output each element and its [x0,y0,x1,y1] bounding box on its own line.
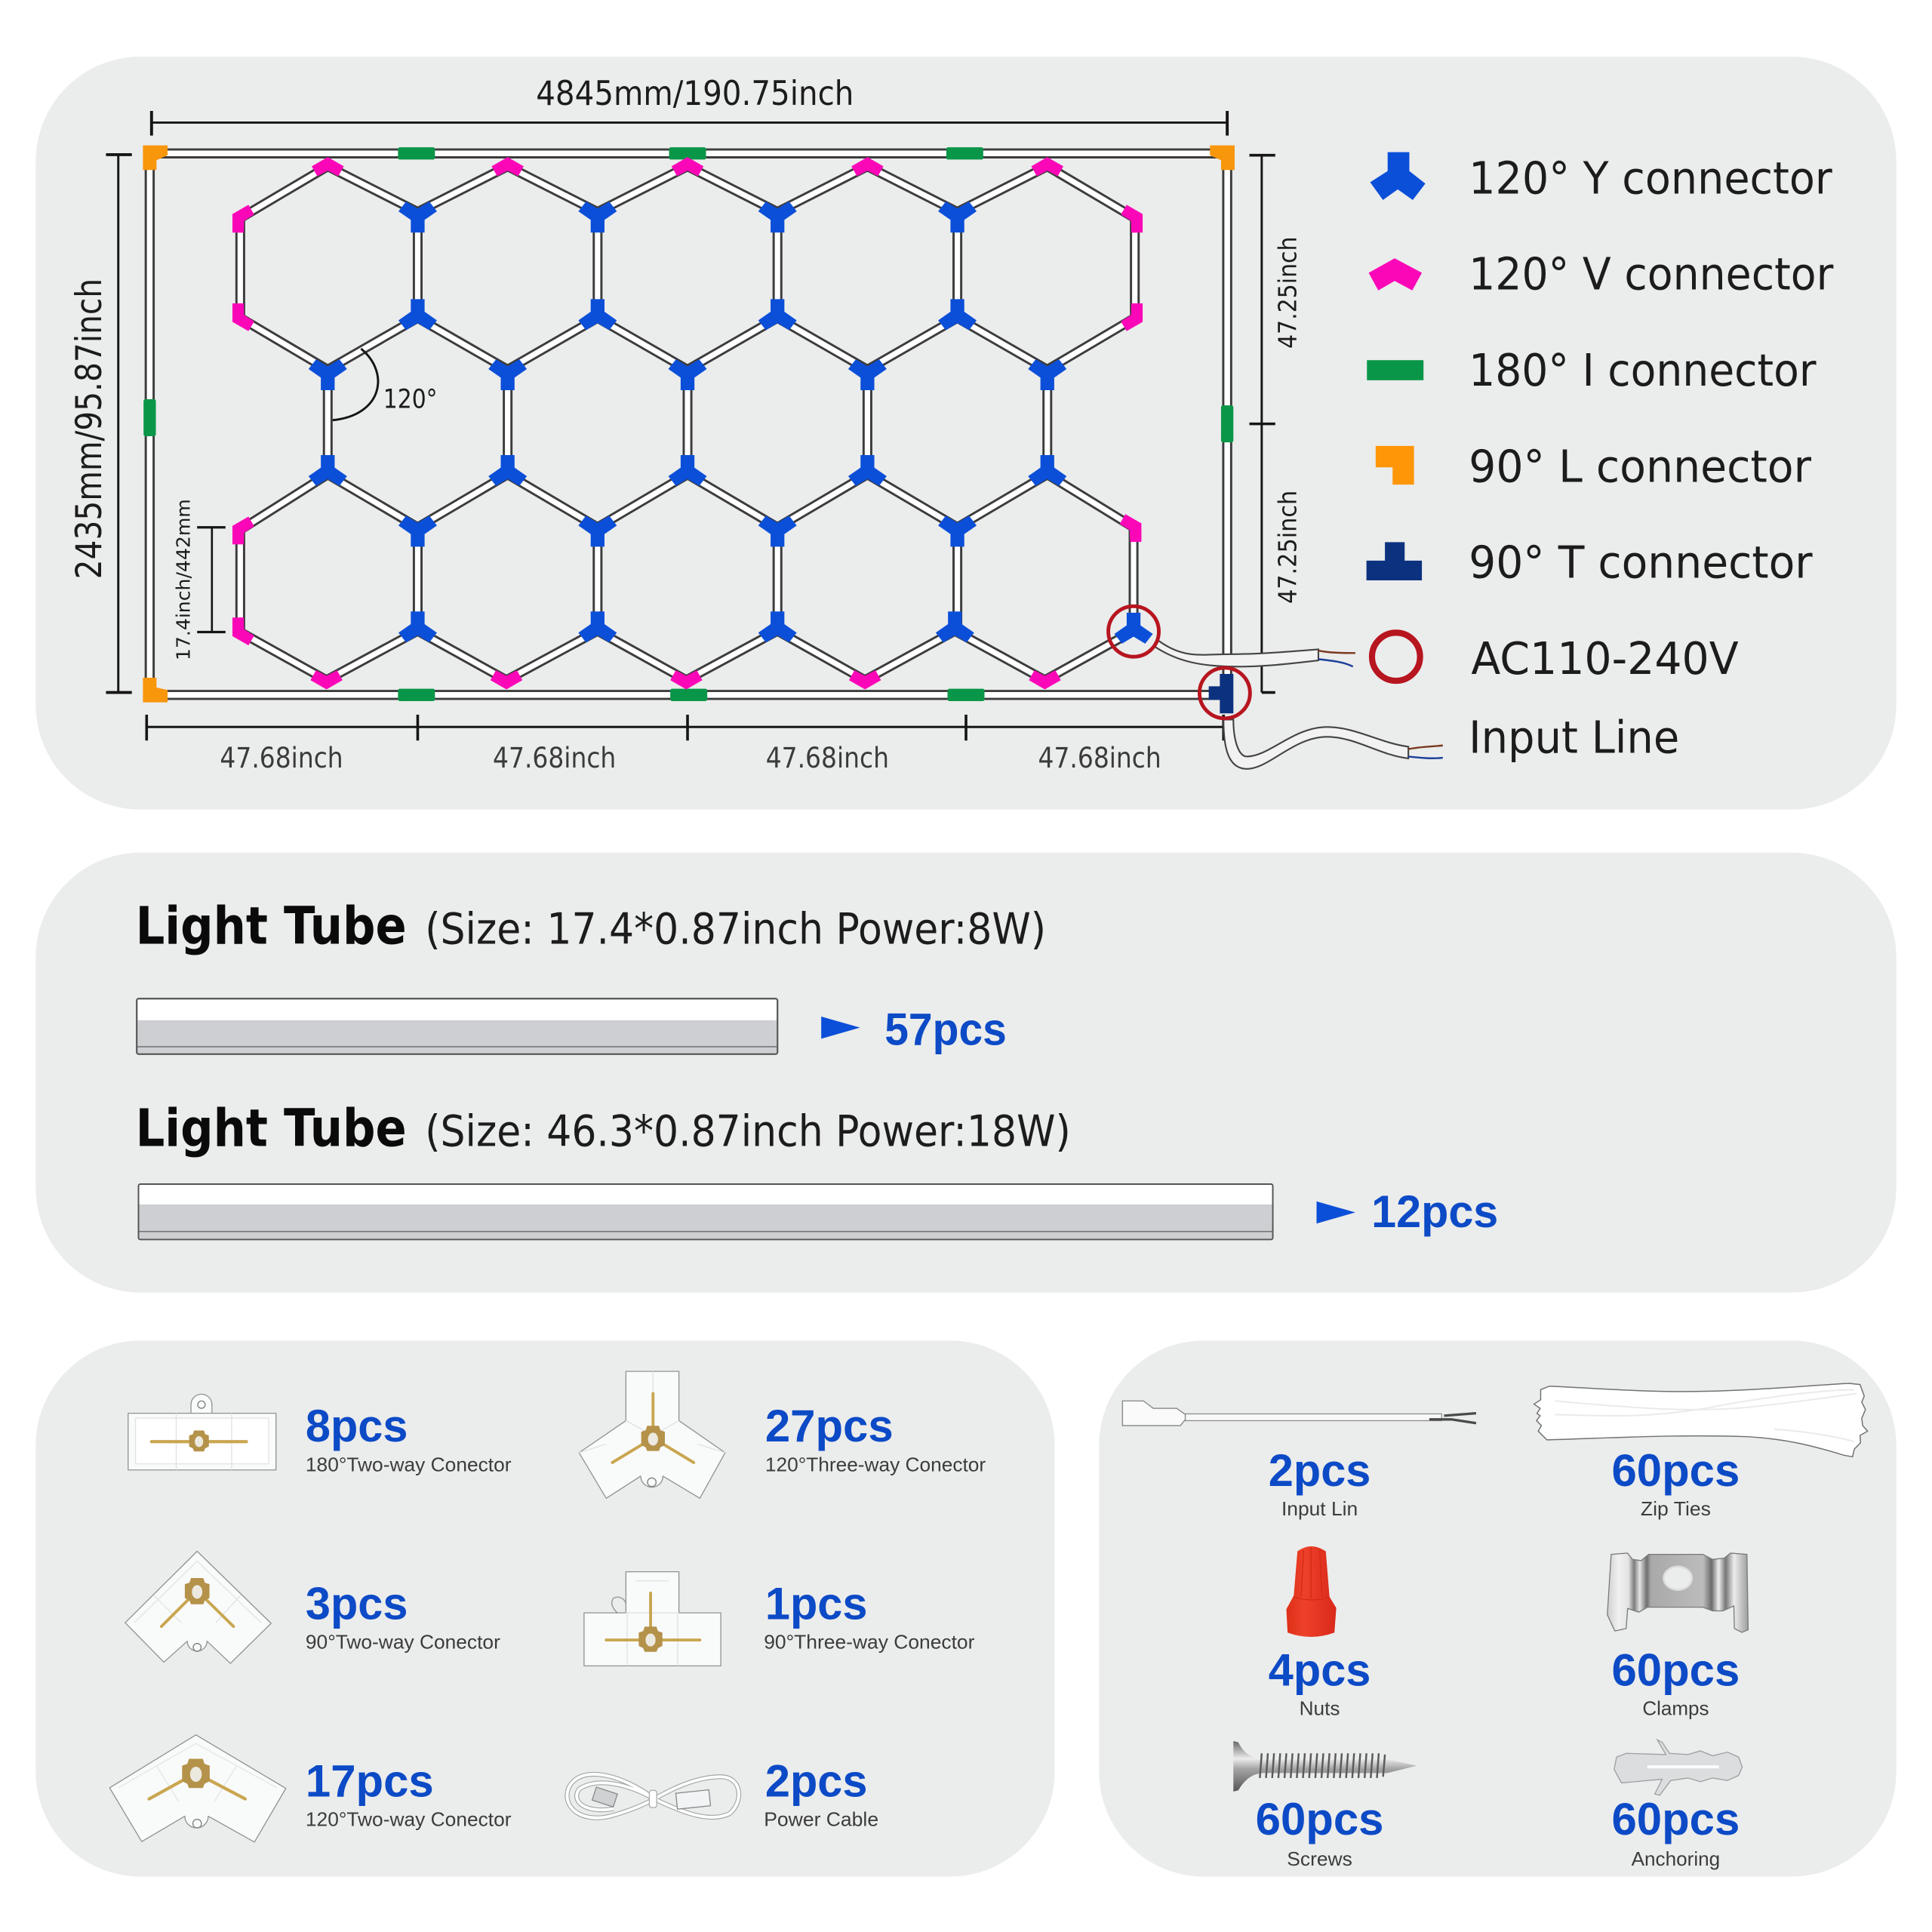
power cable label [764,1755,878,1831]
panel: layout diagram [35,57,1897,810]
icon: 120 degree three-way connector [579,1371,725,1498]
120 degree two-way connector label: 17pcs [306,1755,434,1806]
short tube quantity: 57pcs [884,1003,1007,1054]
120 degree three-way connector label: 27pcs [765,1400,894,1451]
icon: input line [1122,1401,1476,1426]
zip ties label: Zip Ties [1641,1497,1711,1520]
short tube heading: (Size: 17.4*0.87inch Power:8W) [425,905,1046,955]
short tube quantity [821,1003,1007,1054]
120 degree three-way connector label: 120°Three-way Conector [765,1453,986,1475]
short tube illustration [137,998,777,1054]
hexagon grid of light tubes [240,166,1135,680]
overall width dimension: 4845mm/190.75inch [536,75,854,113]
icon: wire nut [1286,1546,1337,1637]
icon: 90 degree two-way connector [125,1552,271,1663]
red marker circles [1109,606,1250,718]
long tube quantity [1316,1186,1498,1237]
panel: accessories [1099,1340,1897,1877]
nuts label: 4pcs [1269,1644,1371,1695]
tube length dimension [172,499,226,660]
legend: T connector: 90° T connector [1469,537,1813,589]
right side height dimensions: 47.25inch [1274,491,1303,604]
icon: wall anchor [1614,1740,1743,1795]
120 degree angle mark [333,349,438,420]
long tube heading [136,1098,1071,1158]
90 degree two-way connector label: 3pcs [306,1577,408,1629]
icon: 120 degree two-way connector [109,1735,286,1842]
icon: screw [1233,1741,1417,1792]
icon: power cable [567,1774,739,1818]
short tube heading [136,897,1046,957]
180 degree two-way connector label [306,1400,512,1475]
long tube quantity: 12pcs [1371,1186,1498,1237]
cable: AC input from Y connector [1153,639,1355,666]
input line label: Input Lin [1281,1497,1358,1520]
power cable label: Power Cable [764,1808,878,1831]
zip ties label [1612,1444,1740,1520]
bottom width dimensions: 47.68inch [493,741,616,774]
icon: zip ties [1534,1383,1868,1457]
bottom width dimensions: 47.68inch [1038,741,1161,774]
bottom width dimensions [146,715,1223,774]
120 degree angle mark: 120° [383,384,438,414]
green I connectors on frame [143,147,1233,701]
180 degree two-way connector label: 180°Two-way Conector [306,1453,512,1475]
cable: input line from T connector [1223,719,1443,769]
120 degree three-way connector label [765,1400,986,1475]
anchoring label: 60pcs [1612,1793,1740,1844]
navy T connector [1209,674,1233,713]
overall width dimension [152,75,1227,136]
overall height dimension [69,155,132,693]
clamps label [1612,1644,1740,1720]
clamps label: Clamps [1642,1697,1709,1720]
90 degree three-way connector label: 1pcs [765,1577,867,1629]
screws label: Screws [1287,1847,1352,1870]
long tube heading: (Size: 46.3*0.87inch Power:18W) [425,1106,1071,1156]
legend: L connector: 90° L connector [1469,440,1812,492]
power cable label: 2pcs [765,1755,867,1806]
90 degree three-way connector label: 90°Three-way Conector [764,1630,975,1653]
180 degree two-way connector label: 8pcs [306,1400,408,1451]
long tube heading: Light Tube [136,1098,407,1158]
icon: clamp [1607,1553,1748,1632]
screws label [1256,1793,1383,1870]
pink V connectors [224,157,1151,689]
right side height dimensions [1250,155,1303,693]
tube length dimension: 17.4inch/442mm [172,499,194,660]
120 degree two-way connector label [306,1755,512,1831]
panel: light tubes [35,853,1897,1293]
legend: AC power marker: AC110-240V [1471,632,1739,685]
legend: I connector: 180° I connector [1469,344,1817,396]
bottom width dimensions: 47.68inch [220,741,343,774]
legend: Y connector: 120° Y connector [1469,152,1833,204]
panel: connectors [35,1340,1055,1877]
legend: V connector: 120° V connector [1469,248,1834,300]
120 degree two-way connector label: 120°Two-way Conector [306,1808,512,1831]
long tube illustration [139,1184,1273,1239]
icon: 90 degree three-way connector [584,1572,721,1666]
short tube heading: Light Tube [136,897,407,957]
nuts label: Nuts [1300,1697,1340,1720]
screws label: 60pcs [1256,1793,1383,1844]
nuts label [1269,1644,1371,1720]
outer frame of light tubes [149,153,1227,695]
input line label: 2pcs [1269,1444,1371,1496]
clamps label: 60pcs [1612,1644,1740,1695]
input line label [1269,1444,1371,1520]
overall height dimension: 2435mm/95.87inch [69,278,110,579]
anchoring label [1612,1793,1740,1870]
icon: 180 degree two-way connector [128,1394,276,1470]
right side height dimensions: 47.25inch [1274,236,1303,349]
legend: input line label: Input Line [1469,712,1679,764]
zip ties label: 60pcs [1612,1444,1740,1496]
anchoring label: Anchoring [1632,1847,1720,1870]
orange L connectors on frame corners [143,146,1235,703]
90 degree three-way connector label [764,1577,975,1653]
90 degree two-way connector label [306,1577,500,1653]
90 degree two-way connector label: 90°Two-way Conector [306,1630,500,1653]
blue Y connectors [309,202,1153,644]
bottom width dimensions: 47.68inch [766,741,889,774]
